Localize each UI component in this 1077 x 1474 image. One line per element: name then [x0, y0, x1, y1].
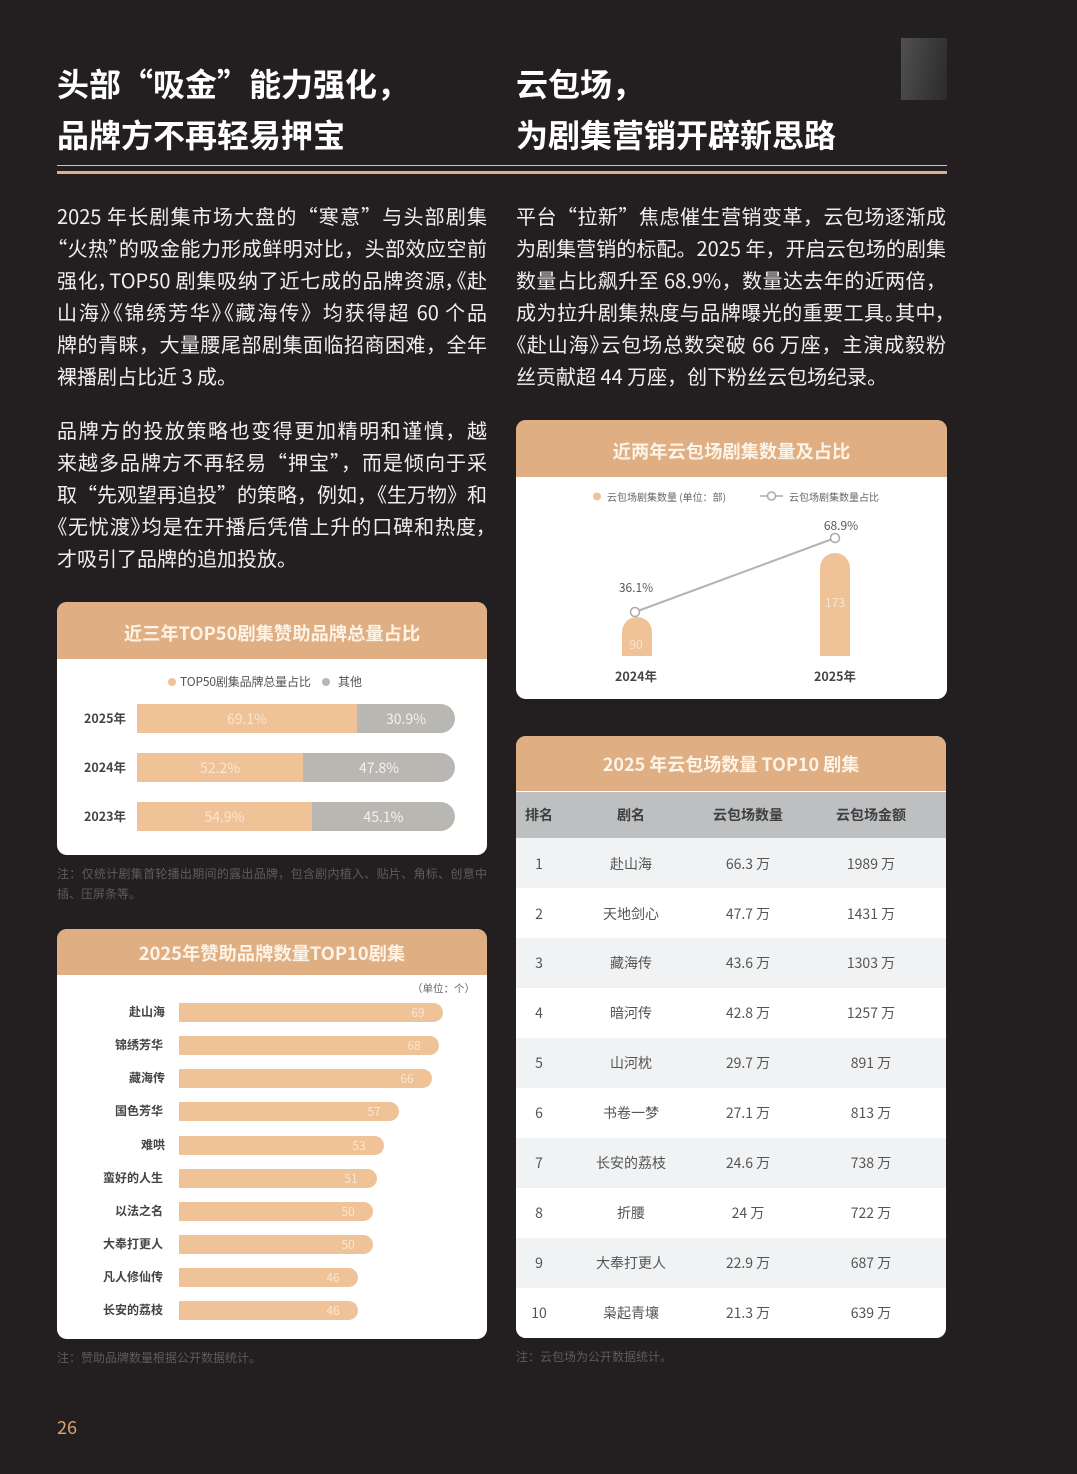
legend: TOP50剧集品牌总量占比: [180, 673, 311, 690]
table header: [516, 792, 946, 838]
text block: left paragraph 1: 裸播剧占比近 3 成。: [57, 361, 237, 390]
panel heading: [516, 736, 946, 791]
panel heading: 2025 年云包场数量 TOP10 剧集: [603, 751, 859, 777]
bar: 以法之名: 以法之名: [115, 1202, 163, 1219]
table header: 排名: [525, 805, 553, 825]
row 2: [516, 888, 946, 938]
row 7: [516, 1138, 946, 1188]
row 9: [516, 1238, 946, 1288]
row: 2023: [84, 802, 455, 831]
text block: left paragraph 1: 2025 年长剧集市场大盘的“寒意”与头部剧集: [57, 201, 487, 230]
note: table panel: 注：云包场为公开数据统计。: [516, 1348, 672, 1365]
row 4: 42.8 万: [726, 1003, 770, 1023]
bar: 藏海传: 藏海传: [129, 1069, 165, 1086]
text block: left paragraph 2: 品牌方的投放策略也变得更加精明和谨慎，越: [57, 415, 487, 444]
bar: 藏海传: 66: [400, 1070, 414, 1087]
bar: 长安的荔枝: 长安的荔枝: [103, 1301, 163, 1318]
bar: 长安的荔枝: [103, 1301, 358, 1320]
row: 2024: 52.2%: [200, 758, 240, 778]
bar: 国色芳华: [115, 1102, 399, 1121]
bar: 大奉打更人: 大奉打更人: [103, 1235, 163, 1252]
row 1: 1: [535, 854, 543, 874]
row 1: 1989 万: [847, 854, 895, 874]
row 9: 687 万: [851, 1253, 891, 1273]
table header: 云包场金额: [836, 805, 906, 825]
panel: TOP50 sponsor share: [57, 602, 487, 855]
combo chart: [593, 489, 879, 685]
bar: 2025: 173: [825, 594, 845, 611]
row 5: 5: [535, 1053, 543, 1073]
row: 2025: 2025年: [84, 708, 126, 727]
legend: 云包场剧集数量 (单位：部): [607, 489, 726, 504]
row 2: 天地剑心: [603, 904, 659, 924]
row 1: 66.3 万: [726, 854, 770, 874]
heading: right column: [516, 60, 836, 157]
bar: 锦绣芳华: [115, 1036, 439, 1055]
row 5: 山河枕: [610, 1053, 652, 1073]
text block: right paragraph: 《赴山海》云包场总数突破 66 万座，主演成毅粉: [516, 329, 946, 358]
row 8: 折腰: [617, 1203, 645, 1223]
row 10: 10: [531, 1303, 547, 1323]
bar: 2025: [820, 553, 850, 656]
text block: left paragraph 1: “火热”的吸金能力形成鲜明对比，头部效应空前: [57, 233, 487, 262]
bar: 凡人修仙传: 46: [326, 1269, 340, 1286]
bar: 国色芳华: 国色芳华: [115, 1102, 163, 1119]
bar: 锦绣芳华: 68: [407, 1037, 421, 1054]
bar: 以法之名: [115, 1202, 373, 1221]
note: TOP50 panel: 注：仅统计剧集首轮播出期间的露出品牌，包含剧内植入、贴片、角标、创意中: [57, 865, 487, 882]
bar: 长安的荔枝: 46: [326, 1302, 340, 1319]
decorative grey block: [901, 38, 947, 100]
row: 2024: 47.8%: [359, 758, 399, 778]
bar: 蛮好的人生: 51: [344, 1170, 358, 1187]
row: 2023: 45.1%: [363, 807, 404, 827]
bar: 2024: [622, 617, 652, 656]
bar: 凡人修仙传: 凡人修仙传: [103, 1268, 163, 1285]
heading: right column: 云包场，: [516, 60, 644, 106]
row 3: 1303 万: [847, 953, 895, 973]
line: share: 68.9%: [824, 517, 858, 534]
row 4: 4: [535, 1003, 543, 1023]
axis labels: [615, 666, 856, 685]
bar: 以法之名: 50: [341, 1203, 355, 1220]
panel heading: 近两年云包场剧集数量及占比: [613, 438, 850, 464]
table header: 云包场数量: [713, 805, 783, 825]
text block: right paragraph: 平台“拉新”焦虑催生营销变革，云包场逐渐成: [516, 201, 946, 230]
line: share: 36.1%: [619, 579, 653, 596]
text block: left paragraph 2: 才吸引了品牌的追加投放。: [57, 543, 297, 572]
bar: 难哄: 53: [352, 1137, 366, 1154]
row: 2024: [84, 753, 455, 782]
row: 2025: 30.9%: [386, 709, 426, 729]
row 5: [516, 1038, 946, 1088]
row: 2023: 54.9%: [204, 807, 245, 827]
row 4: [516, 988, 946, 1038]
heading: right column: 为剧集营销开辟新思路: [516, 111, 836, 157]
row 10: 枭起青壤: [603, 1303, 659, 1323]
legend: [168, 673, 362, 690]
row 1: [516, 838, 946, 888]
note: TOP50 panel: [57, 865, 487, 902]
row 10: [516, 1288, 946, 1338]
row 6: 813 万: [851, 1103, 891, 1123]
panel heading: 2025年赞助品牌数量TOP10剧集: [139, 940, 405, 966]
legend: 其他: [338, 673, 362, 690]
bar: 2024: 90: [629, 636, 643, 653]
text block: right paragraph: [516, 201, 946, 390]
row 7: 长安的荔枝: [596, 1153, 666, 1173]
row 9: 22.9 万: [726, 1253, 770, 1273]
row 3: [516, 938, 946, 988]
axis labels: 2024年: [615, 666, 657, 685]
panel: cloud screening TOP10 table: [516, 736, 946, 1338]
line: share: [619, 517, 858, 616]
panel: cloud screening combo chart: [516, 420, 947, 699]
row: 2025: [84, 704, 455, 733]
row 5: 891 万: [851, 1053, 891, 1073]
note: TOP50 panel: 插、压屏条等。: [57, 885, 141, 902]
text block: left paragraph 1: 强化，TOP50 剧集吸纳了近七成的品牌资源，《赴: [57, 265, 487, 294]
bar: 赴山海: 69: [411, 1004, 425, 1021]
row 6: 27.1 万: [726, 1103, 770, 1123]
row 2: 47.7 万: [726, 904, 770, 924]
row 3: 藏海传: [610, 953, 652, 973]
row 10: 639 万: [851, 1303, 891, 1323]
row 7: 7: [535, 1153, 543, 1173]
text block: right paragraph: 丝贡献超 44 万座，创下粉丝云包场纪录。: [516, 361, 887, 390]
bar: 难哄: 难哄: [141, 1136, 165, 1153]
panel heading: [57, 929, 487, 975]
row 6: [516, 1088, 946, 1138]
row 4: 1257 万: [847, 1003, 895, 1023]
panel: sponsor count TOP10: [57, 929, 487, 1339]
text block: left paragraph 2: 《无忧渡》均是在开播后凭借上升的口碑和热度，: [57, 511, 487, 540]
row 9: 9: [535, 1253, 543, 1273]
legend: 云包场剧集数量占比: [789, 489, 879, 504]
bar: 难哄: [141, 1136, 384, 1155]
row 4: 暗河传: [610, 1003, 652, 1023]
row 8: 722 万: [851, 1203, 891, 1223]
text block: left paragraph 1: 牌的青睐，大量腰尾部剧集面临招商困难，全年: [57, 329, 487, 358]
text block: left paragraph 2: 取“先观望再追投”的策略，例如，《生万物》和: [57, 479, 487, 508]
bar: 赴山海: 赴山海: [129, 1003, 165, 1020]
bar: 蛮好的人生: [103, 1169, 377, 1188]
row 2: 2: [535, 904, 543, 924]
heading: left column: 品牌方不再轻易押宝: [57, 111, 345, 157]
bar: 锦绣芳华: 锦绣芳华: [115, 1036, 163, 1053]
text block: left paragraph 1: [57, 201, 487, 390]
panel heading: [57, 602, 487, 659]
row 3: 43.6 万: [726, 953, 770, 973]
row 10: 21.3 万: [726, 1303, 770, 1323]
page number: 26: [57, 1414, 77, 1440]
text block: right paragraph: 数量占比飙升至 68.9%，数量达去年的近两倍，: [516, 265, 946, 294]
row 9: 大奉打更人: [596, 1253, 666, 1273]
row 8: 8: [535, 1203, 543, 1223]
heading: left column: 头部“吸金”能力强化，: [57, 60, 409, 106]
text block: right paragraph: 为剧集营销的标配。2025 年，开启云包场的剧集: [516, 233, 946, 262]
row 1: 赴山海: [610, 854, 652, 874]
legend: [593, 489, 879, 504]
row 7: 24.6 万: [726, 1153, 770, 1173]
table header: 剧名: [617, 805, 645, 825]
bar: 国色芳华: 57: [367, 1103, 381, 1120]
bar: 大奉打更人: 50: [341, 1236, 355, 1253]
bar: 大奉打更人: [103, 1235, 373, 1254]
unit label: （单位：个）: [412, 981, 475, 996]
note: sponsor panel: 注：赞助品牌数量根据公开数据统计。: [57, 1349, 261, 1366]
bar: 蛮好的人生: 蛮好的人生: [103, 1169, 163, 1186]
text block: left paragraph 2: 来越多品牌方不再轻易“押宝”，而是倾向于采: [57, 447, 487, 476]
panel heading: 近三年TOP50剧集赞助品牌总量占比: [124, 620, 420, 646]
bar: 凡人修仙传: [103, 1268, 358, 1287]
row 7: 738 万: [851, 1153, 891, 1173]
row 3: 3: [535, 953, 543, 973]
row 8: [516, 1188, 946, 1238]
row 6: 6: [535, 1103, 543, 1123]
heading: left column: [57, 60, 409, 157]
row: 2025: 69.1%: [227, 709, 267, 729]
axis labels: 2025年: [814, 666, 856, 685]
row 6: 书卷一梦: [603, 1103, 659, 1123]
row 2: 1431 万: [847, 904, 895, 924]
panel heading: [516, 420, 947, 477]
row: 2023: 2023年: [84, 806, 126, 825]
bar: 赴山海: [129, 1003, 443, 1022]
text block: left paragraph 1: 山海》《锦绣芳华》《藏海传》均获得超 60 个品: [57, 297, 487, 326]
text block: right paragraph: 成为拉升剧集热度与品牌曝光的重要工具。其中，: [516, 297, 946, 326]
text block: left paragraph 2: [57, 415, 487, 572]
bar: 藏海传: [129, 1069, 432, 1088]
row 5: 29.7 万: [726, 1053, 770, 1073]
heading rule: [57, 165, 947, 174]
row: 2024: 2024年: [84, 757, 126, 776]
row 8: 24 万: [732, 1203, 764, 1223]
